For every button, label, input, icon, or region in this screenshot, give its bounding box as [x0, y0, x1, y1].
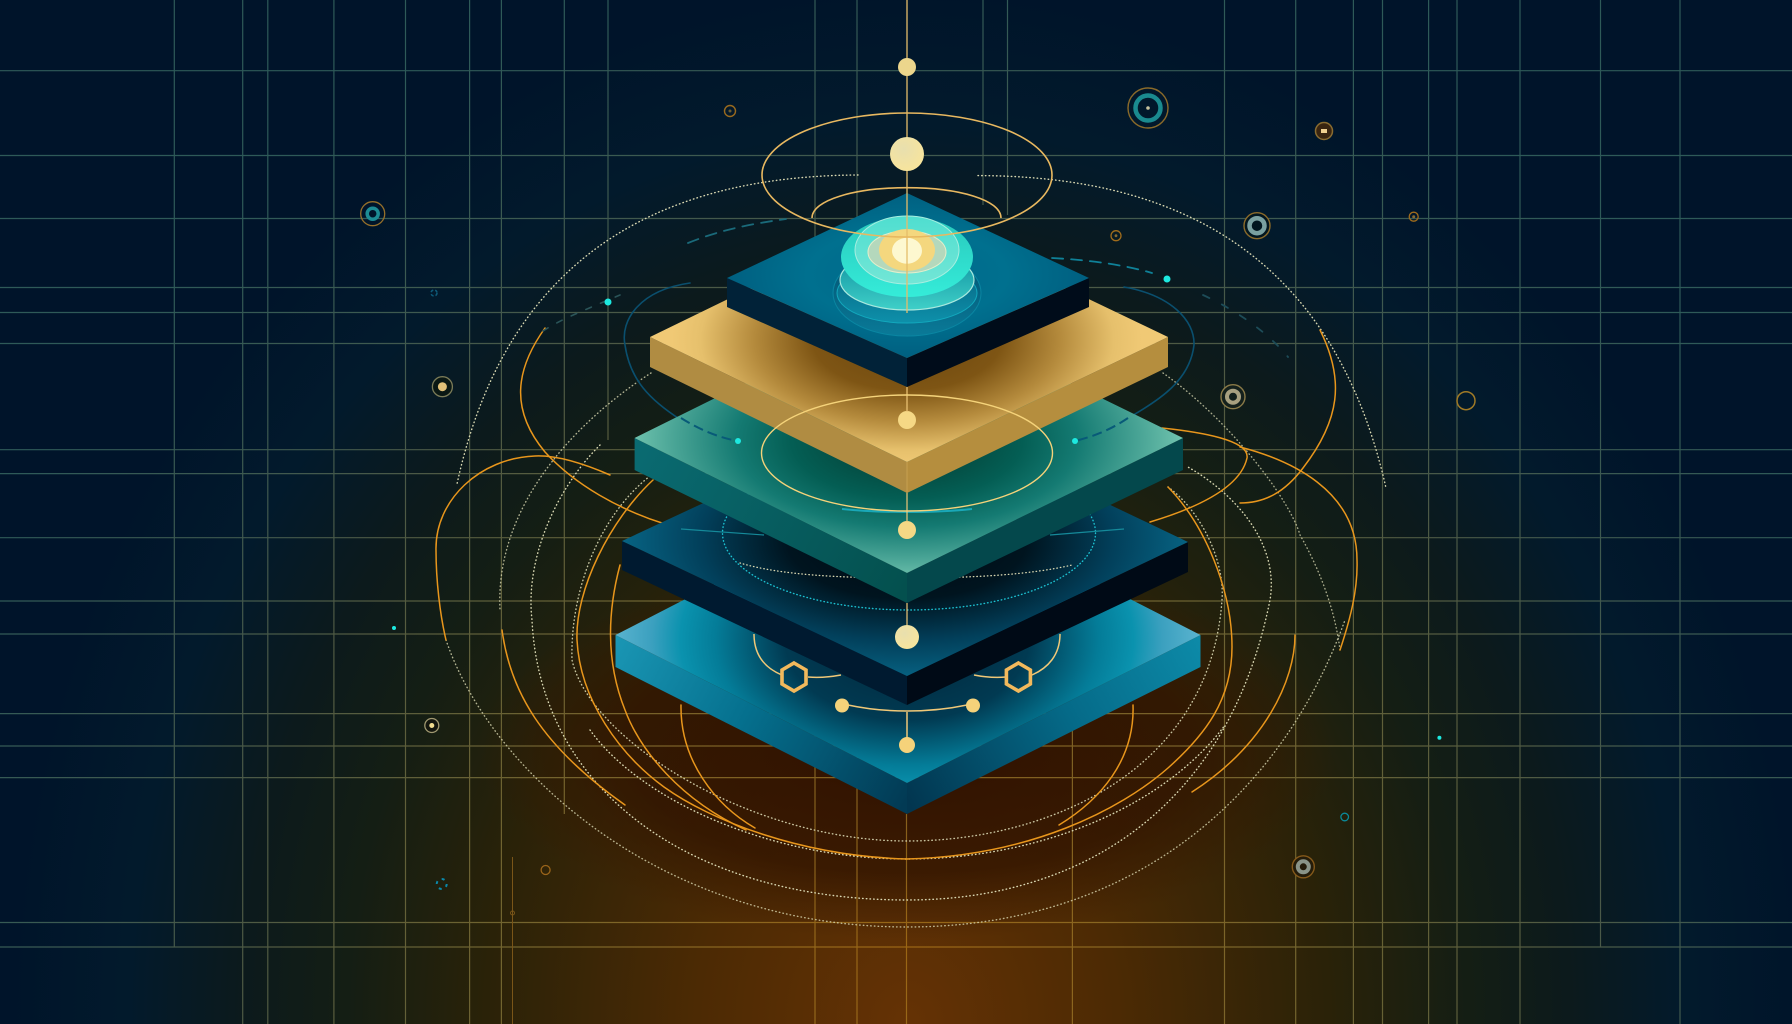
- hexagon right: [1006, 663, 1030, 691]
- inner dotted arc upper: [572, 476, 1222, 841]
- orange orbit curves: [436, 328, 1357, 859]
- under-slab left arc: [681, 705, 755, 828]
- mid cream orbit ring: [762, 395, 1052, 511]
- ring 10: [431, 290, 437, 296]
- ring 18: [1292, 856, 1314, 878]
- layer 3: teal slab: [635, 303, 1183, 603]
- dotted orbit rings: [446, 175, 1386, 927]
- navy slab dotted cyan ring: [722, 456, 1096, 610]
- ring 17: [1341, 813, 1348, 821]
- top gold orbit rings: [762, 113, 1052, 237]
- ring 9: [361, 202, 385, 226]
- big right curve: [1240, 447, 1357, 650]
- upper right dashed arc: [1052, 258, 1152, 273]
- teal slab cyan nodes: [735, 438, 1078, 444]
- left loop: [521, 328, 665, 524]
- cyan sparks: [392, 626, 1441, 740]
- layer 1: top slab: [727, 193, 1089, 387]
- upper right dotted chain: [1163, 373, 1340, 650]
- layer 4: navy slab: [622, 408, 1188, 705]
- hexagon left: [782, 663, 806, 691]
- middle dotted arc: [531, 445, 1271, 900]
- ring 4: [1409, 212, 1418, 221]
- outer right lower curve: [1192, 635, 1295, 792]
- big left curve: [436, 456, 610, 640]
- layer 2: gold slab: [650, 212, 1168, 493]
- navy slab glints: [681, 529, 1124, 535]
- teal slab glint: [842, 509, 972, 512]
- ring 14: [437, 879, 447, 889]
- inner dotted arc lower: [590, 725, 1225, 859]
- ring 2: [1128, 88, 1168, 128]
- blue loop left: [624, 283, 690, 420]
- bottom slab circuit: [754, 634, 1060, 745]
- inner left lower curve: [577, 480, 907, 859]
- second inner left curve: [610, 565, 746, 830]
- teal node: [898, 521, 916, 539]
- right loop: [1240, 330, 1335, 503]
- inner right lower curve: [907, 487, 1232, 859]
- far right faint dashes: [1203, 295, 1288, 357]
- ring 8: [1457, 392, 1475, 410]
- circuit nodes: [835, 698, 980, 753]
- upper left dotted chain: [500, 373, 651, 610]
- outer left lower curve: [502, 630, 625, 805]
- outer top dotted arc right: [978, 176, 1386, 488]
- scattered ring icons: [361, 88, 1475, 1024]
- ring 15: [541, 866, 550, 874]
- ring 13: [425, 718, 439, 732]
- far left faint dashes: [543, 295, 620, 331]
- under-slab right arc: [1059, 705, 1133, 825]
- ring 11: [432, 377, 452, 397]
- outer top dotted arc left: [457, 175, 858, 484]
- gold node: [898, 411, 916, 429]
- blue loop right: [1124, 287, 1194, 418]
- dashed teal arcs: [543, 219, 1288, 420]
- layer 5: bottom blue slab: [616, 485, 1200, 814]
- inner right loop: [1150, 428, 1247, 522]
- teal slab dashes right: [1075, 418, 1128, 441]
- central axis line: [906, 0, 908, 313]
- layered dome core: [833, 216, 981, 336]
- navy node: [895, 625, 919, 649]
- outer bottom dotted arc: [446, 620, 1345, 927]
- glowing cyan dots upper: [604, 276, 1170, 306]
- ring 3: [1316, 122, 1332, 140]
- upper left dashed arc: [688, 219, 786, 243]
- ring 7: [1221, 385, 1245, 409]
- ring 6: [1111, 231, 1121, 241]
- navy slab dotted cream arc: [740, 563, 1072, 578]
- teal slab dashes left: [681, 418, 738, 441]
- ring 1: [724, 106, 736, 116]
- axis tick line: [510, 857, 514, 1024]
- axis nodes top: [890, 58, 924, 171]
- ring 5: [1244, 213, 1270, 239]
